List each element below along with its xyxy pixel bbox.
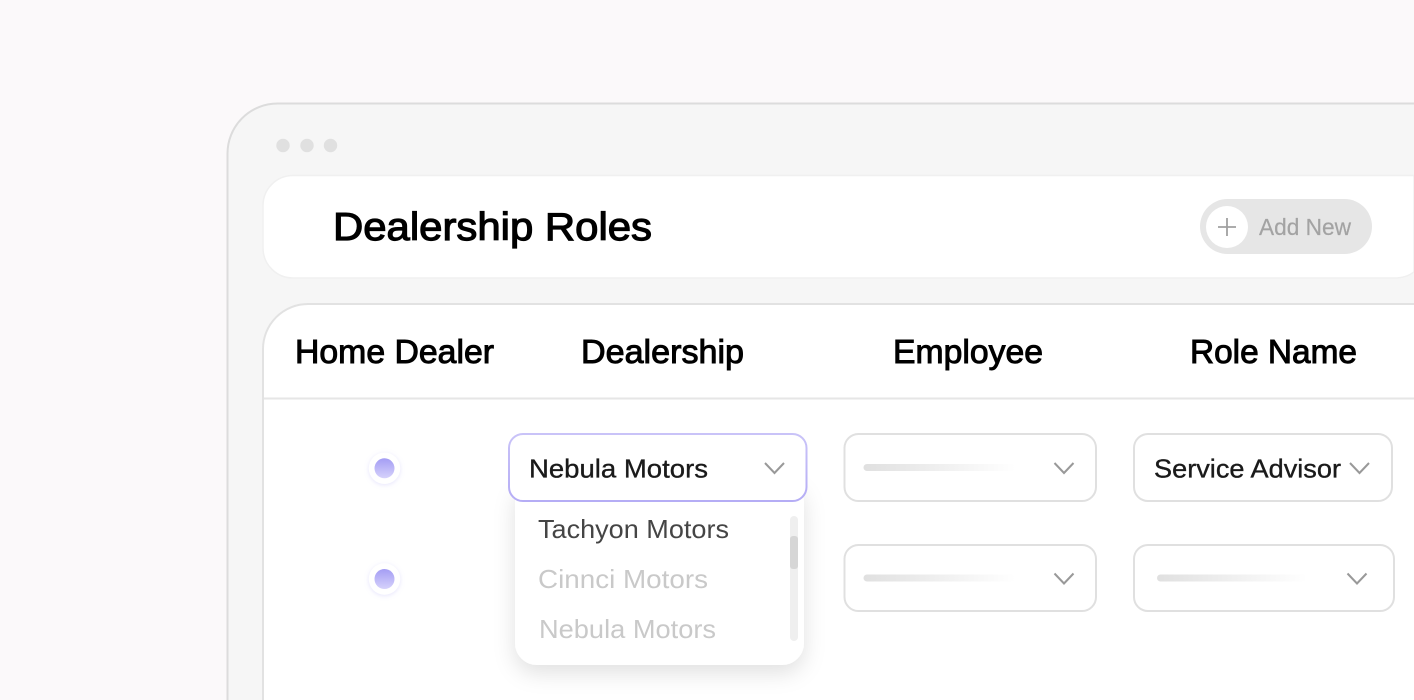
column heading: employee: Employee <box>893 333 1043 370</box>
selected value: Service Advisor <box>1154 454 1341 484</box>
radio row 1 <box>369 453 400 484</box>
selected value: Nebula Motors <box>529 454 708 484</box>
browser window <box>228 104 1414 700</box>
employee select row 1 <box>844 434 1096 501</box>
icon: plus <box>1206 206 1248 248</box>
option: nebula motors: Nebula Motors <box>539 614 716 644</box>
header card <box>263 176 1414 278</box>
employee select row 2 <box>844 545 1096 611</box>
add new button <box>1200 199 1372 254</box>
option: tachyon motors: Tachyon Motors <box>538 514 729 544</box>
radio row 2 <box>369 563 400 595</box>
option: cinnci motors: Cinnci Motors <box>538 564 708 594</box>
icon: chevron <box>1054 463 1074 473</box>
column heading: role name: Role Name <box>1190 333 1357 370</box>
column heading: home dealer: Home Dealer <box>295 333 494 370</box>
icon: chevron <box>765 463 784 473</box>
window control dots <box>276 139 337 152</box>
dealership select row 1 <box>509 434 806 501</box>
column heading: dealership: Dealership <box>581 333 744 370</box>
role select row 2 <box>1134 545 1394 611</box>
page title: Dealership Roles <box>333 206 652 249</box>
button label: Add New <box>1259 214 1352 240</box>
icon: chevron <box>1054 574 1074 584</box>
scrollbar <box>790 516 798 641</box>
icon: chevron <box>1348 574 1366 584</box>
dropdown menu <box>515 480 804 665</box>
icon: chevron <box>1350 463 1369 473</box>
role select row 1 <box>1134 434 1392 501</box>
table panel <box>263 304 1414 700</box>
